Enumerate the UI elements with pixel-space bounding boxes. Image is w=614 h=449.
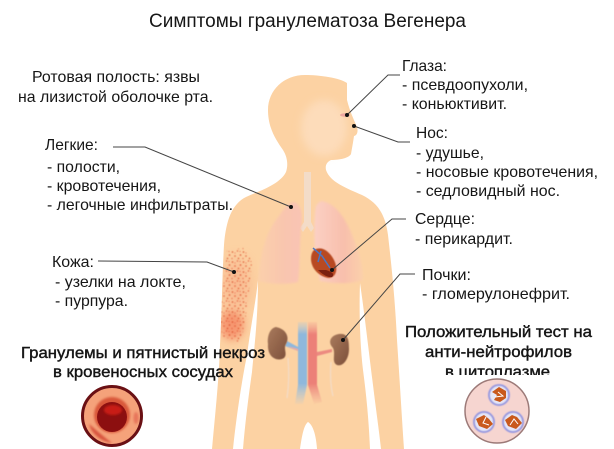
text: eyes: - псевдоопухоли,: [402, 77, 528, 94]
callout: positive test: [406, 325, 592, 375]
face highlight: [301, 100, 347, 156]
trachea: [300, 172, 314, 232]
text: oral cavity: на лизистой оболочке рта.: [18, 89, 213, 106]
text: lungs: - кровотечения,: [47, 178, 161, 195]
text: nose: - носовые кровотечения,: [416, 164, 598, 181]
icon: blood vessel cross-section: [82, 386, 142, 446]
text: nose: - удушье,: [416, 145, 484, 162]
skin rash on arm: [220, 248, 252, 342]
leader line: heart: [330, 219, 406, 272]
callout: positive test: в цитоплазме: [445, 364, 550, 381]
callout: granulomas: в кровеносных сосудах: [53, 364, 233, 381]
text: kidneys: Почки:: [422, 267, 471, 284]
leader line: kidneys: [341, 274, 415, 342]
text: oral cavity: Ротовая полость: язвы: [32, 69, 200, 86]
text: nose: Нос:: [416, 125, 448, 142]
body silhouette: [212, 75, 404, 449]
text: skin: Кожа:: [52, 254, 94, 271]
heart: [311, 248, 336, 278]
text: heart: Сердце:: [415, 211, 475, 228]
text: lungs: - полости,: [47, 159, 120, 176]
text: lungs: [45, 137, 233, 214]
leader line: eyes: [345, 75, 400, 117]
text: skin: - пурпура.: [55, 293, 128, 310]
text: skin: [52, 254, 186, 310]
title: Симптомы гранулематоза Вегенера: [149, 11, 466, 32]
text: oral cavity: [18, 69, 213, 106]
callout: positive test: Положительный тест на: [405, 324, 592, 341]
text: heart: [415, 211, 513, 248]
text: lungs: Легкие:: [45, 137, 98, 154]
neutrophil 3: [503, 412, 523, 432]
text: kidneys: - гломерулонефрит.: [422, 286, 570, 303]
right kidney: [330, 334, 349, 365]
callout: granulomas: Гранулемы и пятнистый некроз: [21, 345, 265, 362]
leader line: skin: [98, 261, 236, 274]
right lung: [314, 201, 363, 283]
text: heart: - перикардит.: [415, 231, 513, 248]
leader line: nose: [352, 124, 410, 142]
text: skin: - узелки на локте,: [55, 274, 186, 291]
vessels: vena cava and aorta: [285, 322, 333, 404]
left kidney: [268, 327, 288, 359]
text: nose: - седловидный нос.: [416, 183, 560, 200]
callout: granulomas: [21, 345, 265, 381]
text: lungs: - легочные инфильтраты.: [47, 197, 233, 214]
callout: positive test: анти-нейтрофилов: [425, 344, 572, 361]
text: eyes: Глаза:: [402, 58, 447, 75]
left lung: [258, 202, 302, 284]
leader line: lungs: [113, 147, 293, 209]
icon: petri dish with neutrophils: [465, 379, 529, 443]
text: eyes: [402, 58, 528, 113]
text: nose: [416, 125, 598, 200]
text: kidneys: [422, 267, 570, 303]
neutrophil 1: [489, 385, 509, 405]
eye: [340, 113, 350, 117]
neutrophil 2: [474, 412, 494, 432]
text: eyes: - коньюктивит.: [402, 96, 507, 113]
